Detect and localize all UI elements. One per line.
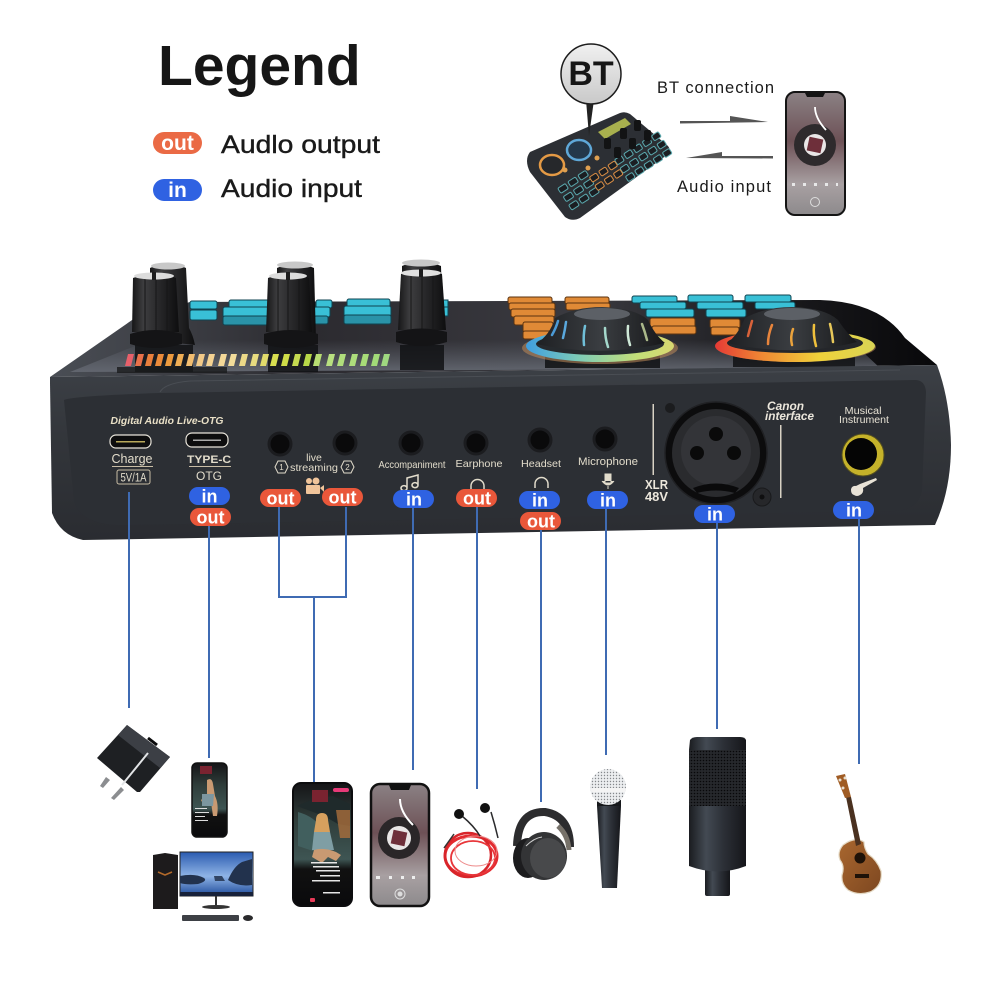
- headphones: [513, 812, 570, 880]
- small mixer with BT badge: BT: [568, 55, 614, 93]
- icon: microphone: [602, 474, 614, 489]
- XLR label: [645, 404, 669, 504]
- phone: live stream: [293, 783, 352, 906]
- orange buttons: [508, 297, 740, 339]
- label: live streaming: 2: [345, 463, 350, 472]
- port: TYPE-C OTG: OTG: [196, 469, 222, 483]
- reflection shadows: [135, 345, 855, 372]
- front face: [50, 365, 951, 540]
- legend: input: Audio input: [221, 175, 362, 203]
- pill: out live 1: [260, 488, 301, 508]
- label: Musical instrument: [839, 406, 889, 426]
- port: TYPE-C OTG: [186, 433, 231, 483]
- pill: in TYPE-C: in: [202, 486, 218, 506]
- label: Musical instrument: Musical: [844, 406, 882, 417]
- small mixer with BT badge: [527, 44, 672, 220]
- label: Microphone: Microphone: [578, 456, 638, 468]
- label: live streaming: live: [306, 452, 322, 464]
- phone: small live stream: [192, 763, 227, 837]
- pill: out headset: out: [527, 512, 555, 532]
- XLR label: 48V: [645, 490, 669, 504]
- pill: out TYPE-C: out: [197, 508, 224, 528]
- pill: in instrument: in: [846, 500, 862, 520]
- knob pair right: [396, 260, 447, 346]
- icon: headphone earphone: [471, 480, 484, 490]
- title: Legend: Legend: [158, 34, 361, 98]
- pill: in headset: [519, 490, 560, 510]
- pill: out headset: [520, 512, 561, 532]
- connector lines: [129, 492, 859, 802]
- reflective strip: [70, 340, 880, 372]
- pill: out TYPE-C: [190, 508, 231, 528]
- pill: in microphone: in: [600, 490, 616, 510]
- knob pair middle: [264, 262, 318, 348]
- label: Canon interface: interface: [765, 409, 814, 423]
- dial left: [522, 307, 678, 364]
- LED level bars: [125, 354, 390, 366]
- label: Accompaniment: Accompaniment: [378, 459, 446, 471]
- pill: in instrument: [833, 500, 874, 520]
- pill: in XLR: [694, 504, 735, 524]
- keyboard: [182, 915, 239, 921]
- pill: out live 2: [322, 488, 363, 508]
- instrument jack: [842, 434, 884, 476]
- pill: in microphone: [587, 490, 628, 510]
- pill: in accompaniment: in: [406, 490, 422, 510]
- legend: output: [153, 131, 380, 159]
- pill: in headset: in: [532, 490, 548, 510]
- phone: music player: [371, 784, 429, 906]
- pill: out earphone: out: [463, 488, 491, 508]
- pill: in accompaniment: [393, 490, 434, 510]
- arrow: audio input from phone: [686, 152, 773, 158]
- device: mixer body: [50, 260, 951, 540]
- label: Canon interface: [765, 399, 814, 498]
- icon: headset: [535, 478, 548, 488]
- device top surface: [50, 300, 937, 377]
- label: Musical instrument: Instrument: [839, 415, 889, 426]
- handheld microphone: [590, 769, 626, 888]
- label: live streaming: [275, 452, 354, 474]
- ukulele: [836, 774, 881, 894]
- studio microphone: [689, 737, 746, 896]
- port: charge USB-C: Charge: [112, 452, 153, 466]
- pill: out earphone: [456, 488, 497, 508]
- label: Headset: Headset: [521, 458, 561, 470]
- port: TYPE-C OTG: TYPE-C: [187, 454, 231, 466]
- legend: output: Audlo output: [221, 131, 380, 159]
- reflected labels: [117, 367, 227, 373]
- desktop computer: [153, 852, 253, 921]
- icon: music note: [401, 475, 418, 491]
- arrow: BT connection to phone: [680, 116, 768, 124]
- label: live streaming: streaming: [290, 462, 338, 474]
- pill: in XLR: in: [707, 504, 723, 524]
- jack sockets: [269, 428, 616, 455]
- label: Earphone: Earphone: [456, 458, 503, 470]
- XLR connector: [665, 402, 771, 506]
- knob pair left: [130, 262, 195, 348]
- icon: video camera: [306, 478, 324, 494]
- icon: guitar: [851, 478, 877, 496]
- charger: [97, 725, 170, 800]
- pill: out live 1: out: [267, 488, 294, 508]
- front inset panel: [64, 380, 926, 525]
- monitor: [180, 852, 253, 896]
- pill: in TYPE-C: [189, 486, 230, 506]
- label: live streaming: 1: [279, 463, 284, 472]
- legend: output: out: [161, 132, 194, 155]
- dial right: [715, 307, 876, 362]
- earphones: [444, 803, 498, 877]
- legend: input: [153, 175, 362, 203]
- legend: input: in: [168, 179, 187, 202]
- phone: music player top: [786, 92, 845, 215]
- port: charge USB-C: [110, 435, 153, 484]
- cyan buttons: [190, 295, 795, 325]
- label: Audio input: Audio input: [677, 178, 771, 196]
- XLR label: XLR: [645, 478, 668, 492]
- tower: [153, 853, 178, 909]
- label: BT connection: BT connection: [657, 79, 774, 97]
- port: charge USB-C: 5V/1A: [120, 472, 147, 484]
- label: Canon interface: Canon: [767, 399, 804, 413]
- port header: Digital Audio Live-OTG: [110, 415, 224, 427]
- pill: out live 2: out: [329, 488, 356, 508]
